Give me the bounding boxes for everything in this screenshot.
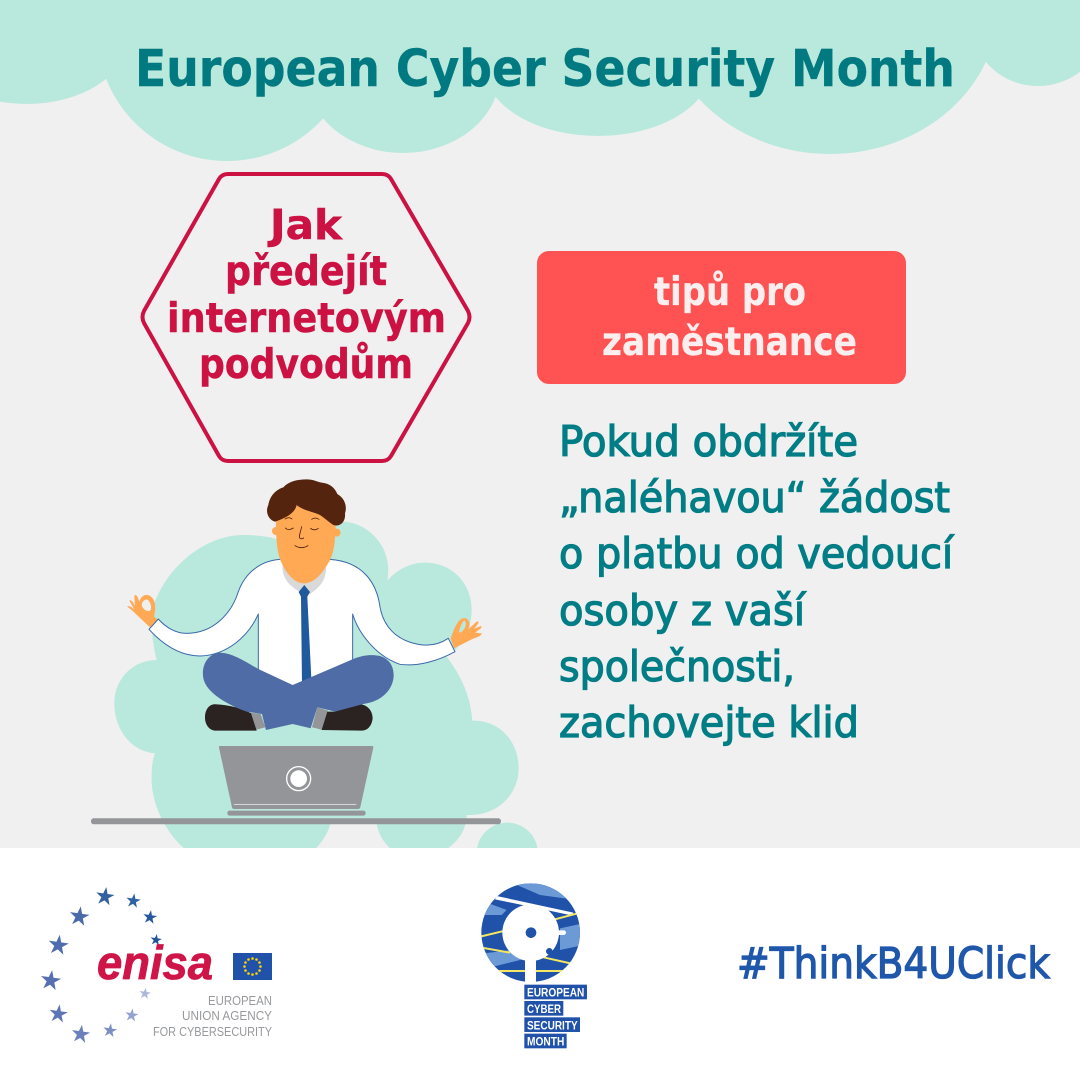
ECSM label: MONTH [527, 1035, 564, 1049]
body text: o platbu od vedoucí [559, 529, 954, 578]
hexagon heading: podvodům [199, 340, 413, 388]
top cloud banner [0, 0, 1080, 161]
red label box [537, 251, 906, 384]
hashtag: #ThinkB4UClick [737, 939, 1050, 989]
illustration: meditating man on laptop [91, 479, 538, 884]
ECSM label: CYBER [527, 1002, 561, 1016]
enisa wordmark: enisa [97, 936, 213, 989]
globe [480, 883, 583, 983]
head [267, 479, 346, 583]
ECSM label: SECURITY [527, 1018, 578, 1032]
agency name: UNION AGENCY [182, 1009, 273, 1023]
ECSM logo [480, 883, 587, 1049]
tie [299, 585, 311, 683]
shoes [205, 704, 373, 731]
hexagon heading: předejít [225, 247, 387, 295]
hexagon badge [142, 174, 470, 461]
laptop [219, 746, 373, 816]
hair [267, 479, 346, 526]
agency name [153, 994, 273, 1039]
socks [250, 707, 328, 730]
face details [285, 518, 319, 548]
left hand [127, 595, 157, 627]
body text: zachovejte klid [559, 698, 859, 747]
label text [602, 270, 857, 365]
body text [559, 417, 954, 747]
hexagon heading: internetovým [167, 294, 446, 342]
collar [282, 565, 326, 594]
body text: Pokud obdržíte [559, 417, 858, 466]
hexagon heading [167, 201, 446, 388]
ECSM label: EUROPEAN [527, 986, 584, 1000]
body text: osoby z vaší [559, 586, 806, 635]
agency name: EUROPEAN [208, 994, 272, 1008]
label text: zaměstnance [602, 320, 857, 365]
agency name: FOR CYBERSECURITY [153, 1025, 273, 1039]
right hand [451, 618, 482, 648]
title: European Cyber Security Month [135, 40, 955, 99]
body text: „naléhavou“ žádost [559, 473, 950, 522]
trousers [203, 653, 394, 730]
shirt [149, 559, 455, 687]
table [91, 818, 501, 824]
ECSM label [524, 985, 587, 1049]
body text: společnosti, [559, 642, 795, 691]
label text: tipů pro [654, 270, 806, 315]
ENISA logo [39, 886, 273, 1043]
hexagon heading: Jak [267, 201, 344, 249]
star ring [39, 886, 162, 1043]
background cloud [114, 522, 538, 884]
EU flag [233, 953, 272, 980]
footer band [0, 848, 1080, 1080]
